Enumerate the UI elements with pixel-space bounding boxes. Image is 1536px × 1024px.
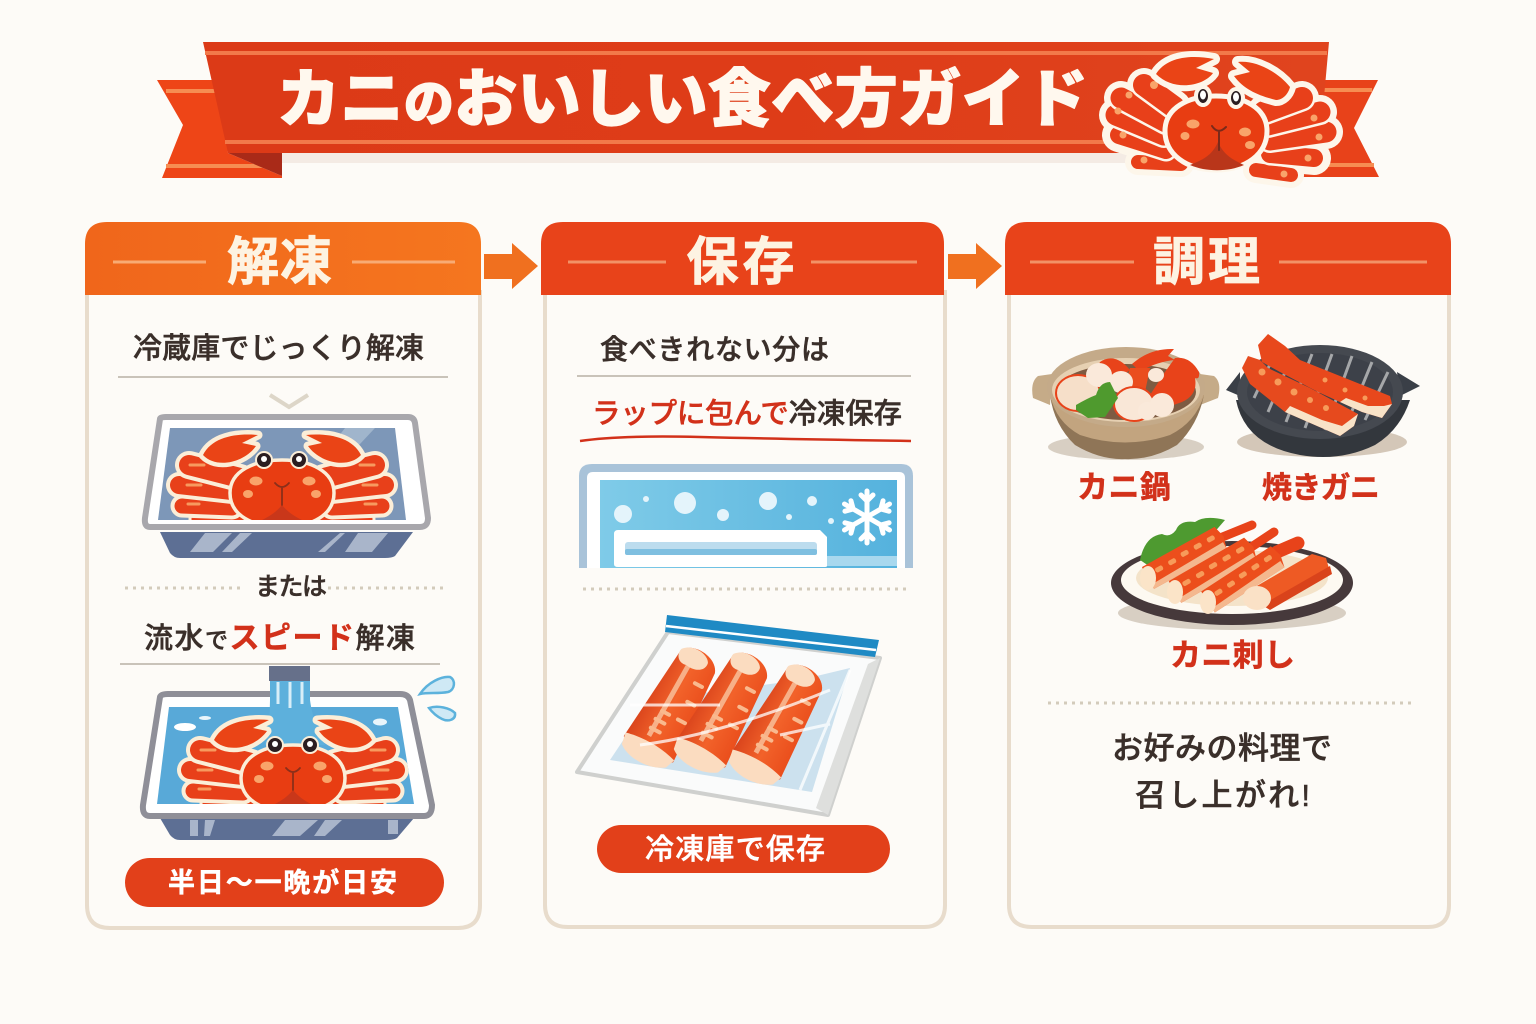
icon: snowflake (841, 491, 893, 543)
text: または: または (255, 573, 327, 601)
icon: freezer (579, 464, 913, 568)
icon: chevron (270, 395, 308, 407)
text: wrap and freeze: ラップに包んで冷凍保存 (592, 398, 902, 430)
dotted divider (1048, 702, 1414, 704)
text: running water thaw: 流水でスピード解凍 (144, 622, 415, 655)
dotted divider (583, 588, 910, 590)
icon: water drops (420, 677, 455, 720)
ribbon tail right (1300, 80, 1379, 177)
text: enjoy: 召し上がれ! (1135, 778, 1310, 813)
icon: crab in tray with running water (143, 666, 432, 840)
pill: freezer storage (597, 825, 890, 873)
pill: duration: 半日～一晩が日安 (168, 867, 397, 898)
pill: duration (125, 858, 444, 907)
icon: freezer bag with crab legs (577, 615, 880, 815)
text: enjoy: お好みの料理で (1112, 731, 1332, 766)
red underline (580, 436, 911, 441)
panel: 調理 (1005, 222, 1451, 927)
title text: カニのおいしい食べ方ガイド (277, 65, 1088, 135)
dotted divider left (125, 586, 245, 590)
panel: 保存 (541, 222, 945, 927)
label: sashimi: カニ刺し (1170, 638, 1295, 673)
panel frame (545, 290, 945, 927)
panel frame (87, 290, 480, 928)
text: enjoy (1112, 731, 1332, 813)
panel heading (541, 222, 944, 295)
text: refrigerator thaw: 冷蔵庫でじっくり解凍 (133, 332, 424, 365)
text: leftover: 食べきれない分は (600, 334, 829, 365)
ribbon tail left (157, 80, 282, 178)
arrow: store to cook (948, 243, 1002, 289)
panel heading: 保存 (686, 234, 794, 292)
icon: grilled crab (1226, 334, 1420, 457)
ribbon main (203, 42, 1329, 153)
icon: crab mascot (1114, 57, 1326, 178)
label: hot pot: カニ鍋 (1077, 470, 1171, 505)
panel frame (1009, 290, 1449, 927)
icon: crab hot pot (1032, 347, 1219, 460)
panel heading (1005, 222, 1451, 295)
arrow: thaw to store (484, 243, 538, 289)
panel heading (85, 222, 481, 295)
dotted divider right (328, 586, 448, 590)
panel heading: 調理 (1153, 234, 1260, 292)
panel: 解凍 (85, 222, 481, 928)
label: grilled crab: 焼きガニ (1262, 472, 1380, 505)
title banner (157, 42, 1379, 178)
banner shadow (282, 153, 1312, 163)
icon: crab in tray (145, 417, 428, 558)
panel heading: 解凍 (227, 234, 332, 292)
icon: crab sashimi plate (1111, 518, 1353, 630)
pill: freezer storage: 冷凍庫で保存 (645, 833, 825, 866)
